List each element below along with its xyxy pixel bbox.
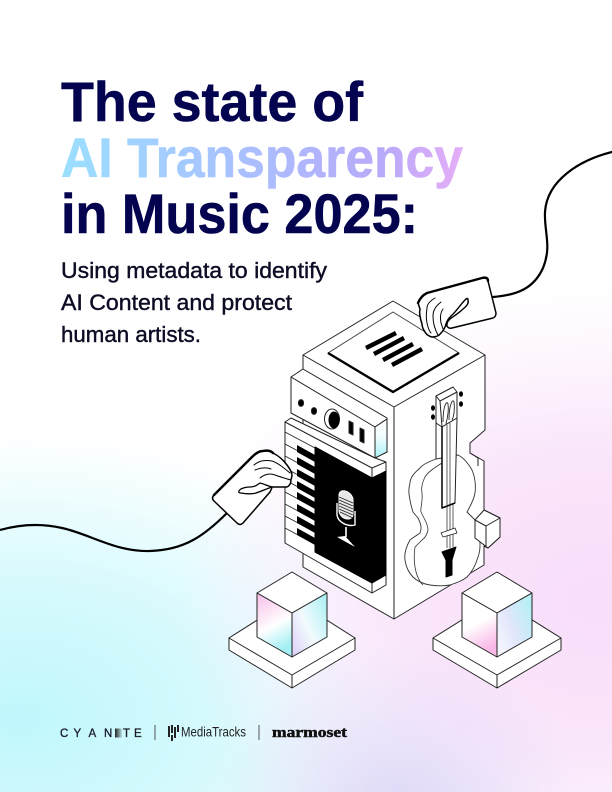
side block — [470, 453, 500, 548]
piano keys — [285, 432, 315, 545]
divider — [258, 725, 260, 740]
icon: MediaTracks bars — [168, 725, 179, 741]
title: in Music 2025: — [61, 182, 418, 245]
logo: MediaTracks: MediaTracks — [181, 724, 246, 740]
violin — [405, 387, 480, 586]
divider — [154, 725, 156, 740]
icon: microphone — [337, 491, 355, 547]
title: AI Transparency — [61, 126, 463, 189]
subtitle: Using metadata to identify — [61, 258, 327, 283]
wire: upper right — [493, 152, 612, 297]
machine body — [303, 301, 500, 619]
logo: Cyanite — [60, 728, 142, 740]
logo: marmoset: marmoset — [272, 725, 347, 741]
control module knobs — [298, 400, 364, 443]
title — [61, 70, 463, 245]
subtitle — [61, 258, 327, 347]
top panel — [328, 312, 459, 392]
keyboard module — [285, 418, 386, 593]
logo: Cyanite: TE — [123, 728, 142, 740]
subtitle: human artists. — [61, 322, 201, 347]
wire: lower left — [0, 513, 227, 551]
hand: lower left — [212, 451, 292, 524]
top panel bars — [366, 333, 422, 365]
logo: Cyanite: CYAN — [60, 728, 112, 740]
right cube on base — [433, 572, 561, 688]
hand: upper right — [418, 278, 496, 337]
machine illustration — [285, 301, 500, 619]
subtitle: AI Content and protect — [61, 290, 292, 315]
left cube on base — [229, 572, 355, 688]
title: The state of — [61, 70, 363, 133]
logo: MediaTracks — [168, 724, 246, 741]
upper control module — [291, 369, 387, 458]
